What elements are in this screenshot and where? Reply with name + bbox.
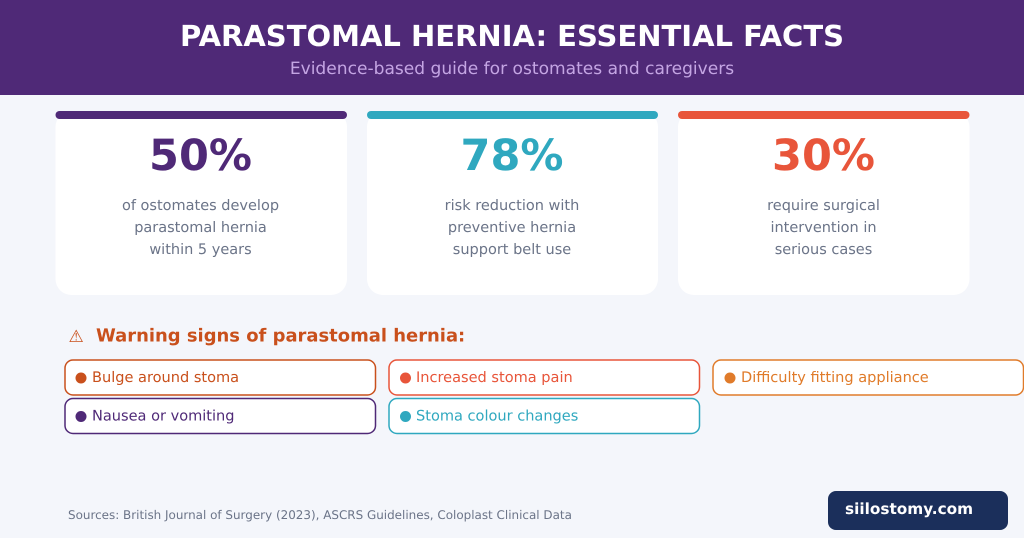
title: PARASTOMAL HERNIA: ESSENTIAL FACTS — [180, 19, 844, 53]
panel: 78% stat card — [367, 111, 658, 295]
warning chip: colour: Stoma colour changes — [416, 408, 578, 424]
panel: 30% stat card — [678, 111, 970, 295]
stat description: within 5 years — [149, 242, 252, 258]
brand badge — [828, 491, 1008, 530]
warning chip: appliance — [713, 360, 1024, 395]
warning chip: appliance: Difficulty fitting appliance — [741, 369, 929, 386]
warning heading — [68, 326, 465, 347]
subtitle: Evidence-based guide for ostomates and caregivers — [290, 59, 734, 79]
header banner — [0, 0, 1024, 95]
warning chip: nausea: Nausea or vomiting — [92, 408, 235, 424]
stat number: 30% — [772, 131, 875, 181]
stat description: of ostomates develop — [122, 198, 279, 214]
stat description: require surgical — [767, 198, 880, 214]
brand badge: siilostomy.com — [845, 500, 973, 518]
warning chip: stoma pain: Increased stoma pain — [416, 369, 573, 386]
stat description: risk reduction with — [445, 198, 579, 214]
warning chip: bulge — [65, 360, 376, 395]
warning chip: colour — [389, 398, 700, 434]
warning chip: stoma pain — [389, 360, 700, 395]
heading text: Warning signs of parastomal hernia: — [96, 326, 465, 346]
stat description: parastomal hernia — [134, 220, 267, 236]
stat description: support belt use — [453, 242, 571, 258]
stat description: preventive hernia — [448, 220, 576, 236]
icon: warning triangle: ⚠ — [68, 327, 84, 347]
warning chip: nausea — [65, 398, 376, 434]
panel: 50% stat card — [56, 111, 347, 295]
warning chip: bulge: Bulge around stoma — [92, 369, 239, 386]
stat number: 78% — [461, 131, 563, 181]
stat number: 50% — [149, 131, 252, 181]
stat description: intervention in — [770, 220, 877, 236]
sources: Sources: British Journal of Surgery (2023), ASCRS Guidelines, Coloplast Clinical Data — [68, 508, 572, 522]
stat description: serious cases — [775, 242, 872, 258]
